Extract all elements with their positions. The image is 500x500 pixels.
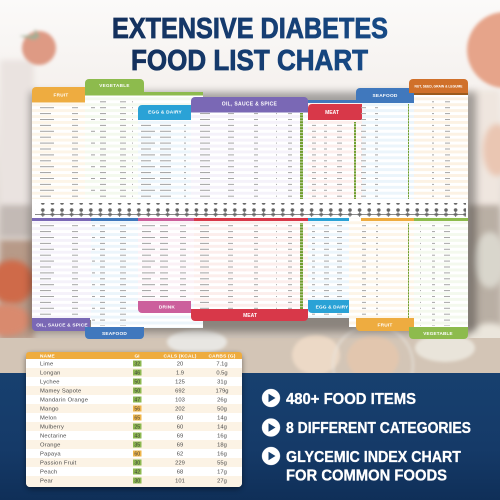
panel: meat list bottom: [191, 218, 308, 321]
panel: oil sauce and spice list bottom: [32, 218, 91, 331]
calories column: 20: [177, 362, 183, 368]
panel: top sheet of food lists: [32, 79, 468, 200]
panel: seafood list bottom: [85, 218, 203, 339]
navy bottom band: [0, 373, 500, 500]
GI values column: 60: [134, 452, 140, 458]
heading: oil sauce and spice tab: OIL, SAUCE & SPICE: [222, 101, 278, 107]
calories column: 125: [175, 380, 185, 386]
GI values column: 43: [134, 434, 140, 440]
feature: glycemic index chart: GLYCEMIC INDEX CHART: [286, 449, 461, 466]
heading: fruit tab: FRUIT: [53, 92, 69, 98]
carbs column: 27g: [217, 479, 227, 485]
carbs column: 55g: [217, 461, 227, 467]
feature: glycemic index chart: FOR COMMON FOODS: [286, 468, 447, 484]
carbs column: 31g: [217, 380, 227, 386]
heading: meat bottom tab: MEAT: [243, 313, 257, 319]
food names column: Orange: [40, 443, 61, 449]
heading: nut seed grain and legume tab: NUT, SEED, GRAIN & LEGUME: [414, 84, 463, 88]
calories column: 60: [177, 416, 183, 422]
icon: tomato top left: [19, 29, 56, 65]
food names column: Mandarin Orange: [40, 398, 88, 404]
table header: NAME: [40, 354, 56, 360]
food names column: Pear: [40, 479, 53, 485]
heading: drink tab: DRINK: [159, 305, 175, 311]
title: [112, 13, 388, 77]
panel: drink list: [138, 218, 194, 313]
panel: seafood list: [356, 88, 414, 200]
heading: seafood bottom tab: SEAFOOD: [102, 331, 127, 337]
GI values column: 65: [134, 416, 140, 422]
calories column: 101: [175, 479, 185, 485]
panel: oil sauce and spice list: [191, 97, 308, 200]
GI values column: 30: [134, 479, 140, 485]
calories column: [175, 362, 185, 485]
carbs column: 26g: [217, 398, 227, 404]
food names column: Melon: [40, 416, 57, 422]
feature: categories: 8 DIFFERENT CATEGORIES: [286, 420, 471, 437]
panel: fruit list: [32, 87, 86, 200]
table header: GI: [134, 354, 140, 360]
heading: seafood tab: SEAFOOD: [372, 93, 398, 99]
food names column: Peach: [40, 470, 57, 476]
calories column: 103: [175, 398, 185, 404]
feature: glycemic index chart: [262, 447, 461, 484]
food names column: Passion Fruit: [40, 461, 77, 467]
calories column: 69: [177, 443, 183, 449]
calories column: 692: [175, 389, 185, 395]
calories column: 202: [175, 407, 185, 413]
heading: oil sauce and spice bottom tab: OIL, SAUCE & SPICE: [36, 322, 88, 328]
carbs column: 17g: [217, 470, 227, 476]
calories column: 229: [175, 461, 185, 467]
heading: fruit bottom tab: FRUIT: [377, 322, 393, 328]
GI values column: [134, 362, 140, 485]
heading: meat tab: MEAT: [325, 110, 339, 116]
heading: vegetable bottom tab: VEGETABLE: [423, 331, 453, 336]
food names column: Nectarine: [40, 434, 67, 440]
calories column: 62: [177, 452, 183, 458]
panel: bottom sheet of food lists: [32, 218, 468, 339]
food names column: Longan: [40, 371, 61, 377]
heading: egg and dairy tab: EGG & DAIRY: [148, 110, 182, 116]
panel: egg and dairy list bottom: [308, 218, 361, 318]
GI badges: [133, 360, 142, 484]
panel: fruit list bottom: [349, 218, 414, 331]
GI values column: 46: [134, 371, 140, 377]
icon: tomato top right: [467, 12, 500, 88]
calories column: 69: [177, 434, 183, 440]
GI values column: 32: [134, 362, 140, 368]
food names column: Mango: [40, 407, 59, 413]
food names column: Papaya: [40, 452, 61, 458]
title: FOOD LIST CHART: [131, 45, 368, 77]
carbs column: [216, 362, 228, 485]
food names column: [40, 362, 88, 485]
panel: vegetable list bottom: [409, 218, 468, 339]
carbs column: 16g: [217, 452, 227, 458]
sheet shadow: [30, 92, 476, 332]
panel: egg and dairy list: [138, 105, 192, 200]
carbs column: 7.1g: [216, 362, 228, 368]
carbs column: 0.5g: [216, 371, 228, 377]
GI values column: 42: [134, 470, 140, 476]
panel: meat list: [308, 100, 362, 200]
carbs column: 18g: [217, 443, 227, 449]
heading: egg and dairy bottom tab: EGG & DAIRY: [316, 304, 349, 310]
carbs column: 14g: [217, 416, 227, 422]
calories column: 68: [177, 470, 183, 476]
carbs column: 16g: [217, 434, 227, 440]
carbs column: 179g: [216, 389, 228, 395]
feature list: [262, 389, 471, 484]
food names column: Lime: [40, 362, 53, 368]
GI values column: 30: [134, 461, 140, 467]
food names column: Lychee: [40, 380, 60, 386]
table header: CALS (KCAL): [163, 354, 197, 360]
GI values column: 50: [134, 380, 140, 386]
calories column: 1.9: [176, 371, 184, 377]
feature: food items: 480+ FOOD ITEMS: [286, 391, 416, 408]
GI values column: 35: [134, 443, 140, 449]
carbs column: 50g: [217, 407, 227, 413]
calories column: 60: [177, 425, 183, 431]
GI values column: 50: [134, 389, 140, 395]
heading: vegetable tab: VEGETABLE: [99, 83, 130, 88]
carbs column: 14g: [217, 425, 227, 431]
table header: [40, 354, 236, 360]
GI values column: 25: [134, 425, 140, 431]
GI values column: 47: [134, 398, 140, 404]
GI values column: 56: [134, 407, 140, 413]
panel: nut seed grain and legume list: [409, 79, 468, 200]
panel: vegetable list: [85, 79, 203, 200]
food names column: Mulberry: [40, 425, 64, 431]
panel: fruit glycemic index table: [26, 352, 242, 489]
title: EXTENSIVE DIABETES: [112, 13, 388, 45]
table header: CARBS (G): [208, 354, 236, 360]
spiral binding: [32, 199, 468, 219]
food names column: Mamey Sapote: [40, 389, 81, 395]
